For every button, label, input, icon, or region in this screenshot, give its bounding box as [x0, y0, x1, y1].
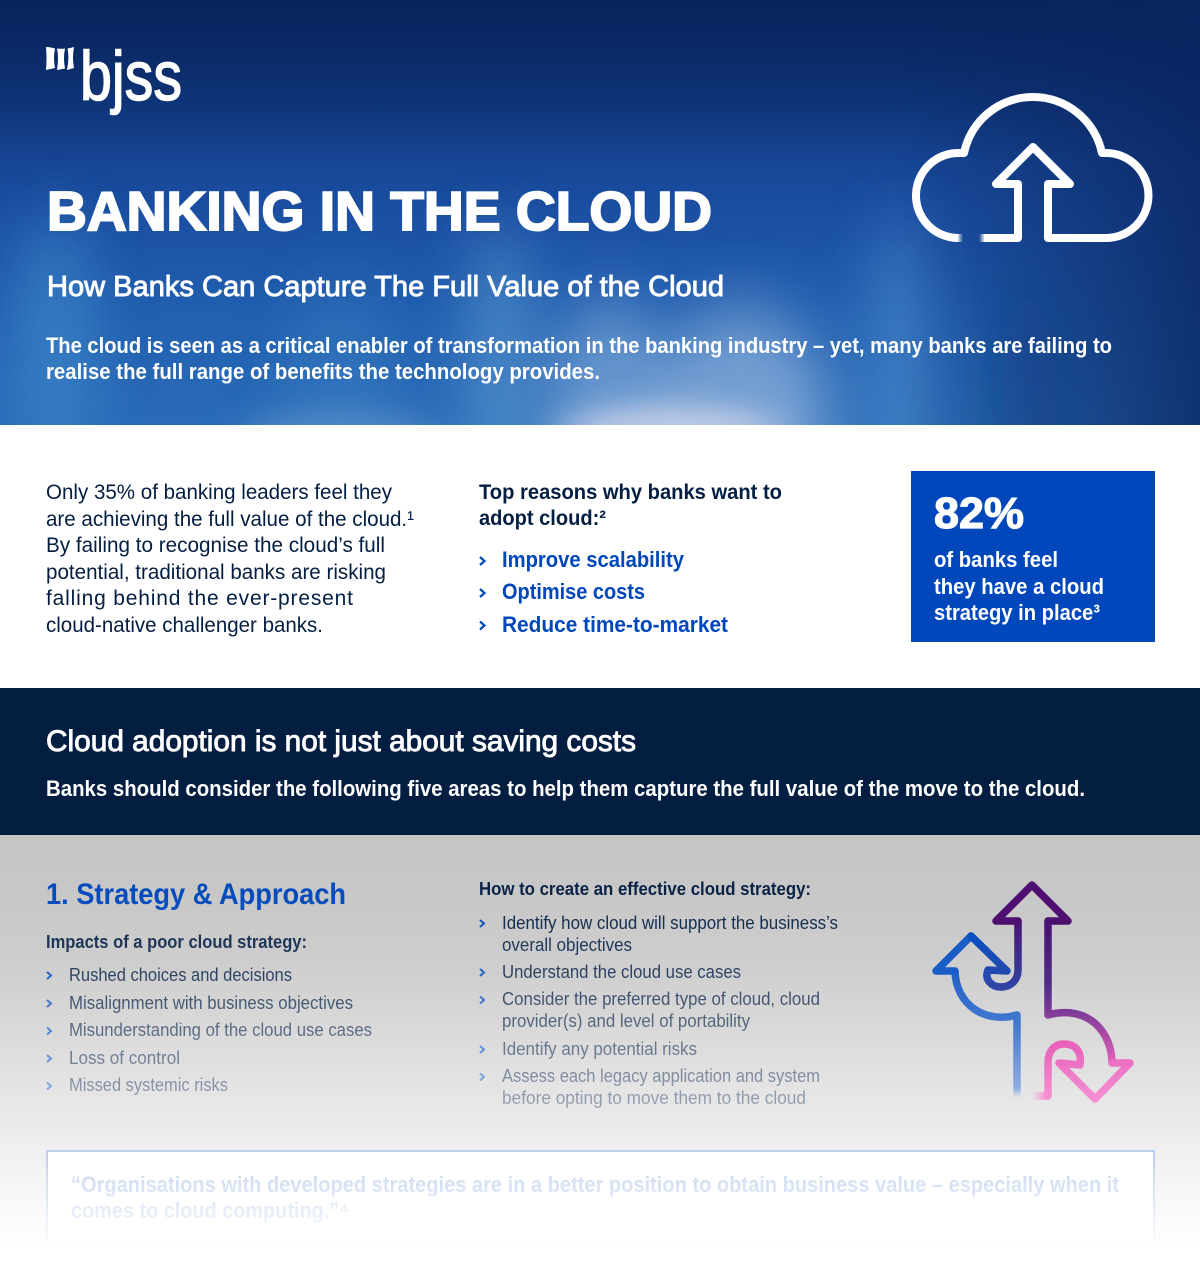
list: how to create an effective cloud strategy: provider(s) and level of portability: [502, 1011, 750, 1031]
list: how to create an effective cloud strategy: Consider the preferred type of cloud, cloud: [502, 989, 820, 1009]
icon: diverging arrows: [936, 885, 1130, 1099]
stat callout: 82%: of banks feel: [934, 547, 1058, 572]
list: impacts of a poor cloud strategy: Missed systemic risks: [69, 1075, 228, 1095]
intro text: The cloud is seen as a critical enabler of transformation in the banking industry – yet, many banks are failing to: [46, 333, 1112, 358]
intro paragraph: falling behind the ever-present: [46, 587, 353, 610]
banner: cloud adoption: [0, 688, 1200, 835]
logo: bjss: bjss: [80, 37, 182, 115]
intro paragraph: [46, 481, 414, 637]
list: how to create an effective cloud strategy: overall objectives: [502, 935, 632, 955]
banner: cloud adoption: Banks should consider the following five areas to help them capture the full value of the move to the cloud.: [46, 776, 1085, 801]
list: impacts of a poor cloud strategy: Loss of control: [69, 1048, 180, 1068]
top reasons list: adopt cloud:²: [479, 507, 606, 530]
list: how to create an effective cloud strategy: Identify how cloud will support the business’s: [502, 913, 838, 933]
list: how to create an effective cloud strategy: before opting to move them to the cloud: [502, 1088, 806, 1108]
hero background: [0, 0, 1200, 530]
banner: cloud adoption: Cloud adoption is not just about saving costs: [46, 725, 636, 758]
top reasons list: Improve scalability: [502, 547, 685, 572]
intro paragraph: potential, traditional banks are risking: [46, 561, 386, 584]
list: how to create an effective cloud strategy: Assess each legacy application and system: [502, 1066, 820, 1086]
intro paragraph: Only 35% of banking leaders feel they: [46, 481, 392, 504]
stat callout: 82%: strategy in place³: [934, 600, 1100, 625]
quote box: “Organisations with developed strategies are in a better position to obtain business value – especially when it: [71, 1172, 1120, 1197]
intro text: realise the full range of benefits the technology provides.: [46, 359, 600, 384]
top reasons list: Optimise costs: [502, 579, 645, 604]
title: BANKING IN THE CLOUD: [47, 180, 712, 242]
list: impacts of a poor cloud strategy: Rushed choices and decisions: [69, 965, 292, 985]
list: how to create an effective cloud strategy: [479, 879, 838, 1108]
quote box: [47, 1151, 1154, 1242]
section background: [0, 835, 1200, 1282]
top reasons list: Reduce time-to-market: [502, 612, 729, 637]
fade overlay: [0, 835, 1200, 1282]
list: impacts of a poor cloud strategy: Misalignment with business objectives: [69, 993, 353, 1013]
quote box: comes to cloud computing.”⁴: [71, 1198, 349, 1223]
subtitle: How Banks Can Capture The Full Value of the Cloud: [47, 271, 724, 303]
stat callout: 82%: they have a cloud: [934, 574, 1104, 599]
stat callout: 82%: 82%: [934, 489, 1024, 538]
list: impacts of a poor cloud strategy: Misunderstanding of the cloud use cases: [69, 1020, 372, 1040]
icon: cloud upload: [916, 97, 1148, 238]
list: how to create an effective cloud strategy: Identify any potential risks: [502, 1039, 697, 1059]
list: impacts of a poor cloud strategy: [46, 932, 372, 1095]
intro paragraph: are achieving the full value of the cloud.¹: [46, 508, 414, 531]
list: how to create an effective cloud strategy: How to create an effective cloud strategy:: [479, 879, 811, 899]
intro text: [46, 333, 1112, 384]
intro paragraph: cloud-native challenger banks.: [46, 614, 323, 637]
list: impacts of a poor cloud strategy: Impacts of a poor cloud strategy:: [46, 932, 307, 952]
stat callout: 82%: [911, 471, 1155, 642]
heading: strategy and approach: 1. Strategy & Approach: [46, 878, 346, 911]
logo: bjss: [46, 37, 182, 115]
intro paragraph: By failing to recognise the cloud’s full: [46, 534, 385, 557]
list: how to create an effective cloud strategy: Understand the cloud use cases: [502, 962, 741, 982]
top reasons list: Top reasons why banks want to: [479, 481, 782, 504]
top reasons list: [479, 481, 782, 637]
